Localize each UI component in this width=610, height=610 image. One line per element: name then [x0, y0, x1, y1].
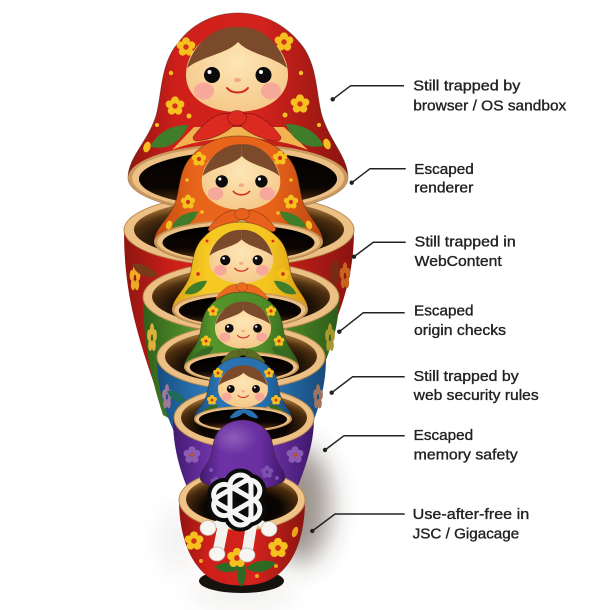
label: browser / OS sandbox — [330, 79, 567, 115]
label: web security rules: web security rules — [413, 388, 539, 404]
doll 2 top: orange — [154, 136, 323, 264]
label: still trapped in WebContent: WebContent — [415, 254, 502, 270]
doll 5 top: blue — [194, 357, 292, 432]
label: escaped renderer: renderer — [414, 181, 473, 197]
doll 3 lower shell: green — [143, 262, 339, 430]
label: web security rules: Still trapped by — [414, 369, 520, 385]
label: escaped renderer — [350, 162, 474, 197]
drop shadow — [166, 447, 330, 597]
doll 3 top: yellow — [172, 222, 308, 328]
label: use-after-free: JSC / Gigacage — [413, 526, 519, 542]
label: web security rules — [330, 369, 539, 404]
logo — [210, 475, 264, 525]
label: browser / OS sandbox: Still trapped by — [413, 79, 521, 95]
legs and arms — [212, 520, 268, 553]
purple top half — [200, 420, 285, 490]
label: escaped memory safety: memory safety — [414, 447, 519, 463]
label: escaped renderer: Escaped — [414, 162, 474, 178]
label: use-after-free: Use-after-free in — [413, 507, 529, 523]
label: escaped origin checks: origin checks — [414, 323, 506, 339]
label: use-after-free — [310, 507, 529, 542]
doll 1 top: red headscarf doll — [128, 13, 348, 212]
label: escaped memory safety: Escaped — [414, 428, 473, 444]
label: browser / OS sandbox: browser / OS sandbox — [413, 99, 567, 115]
label: escaped origin checks — [337, 304, 506, 339]
doll 5 lower shell: purple — [173, 388, 314, 505]
doll 1 lower shell: red — [124, 194, 354, 410]
label: still trapped in WebContent — [352, 235, 516, 270]
doll 4 top: green — [184, 292, 299, 383]
gold chest panel — [172, 127, 308, 150]
label: still trapped in WebContent: Still trapped in — [415, 235, 516, 251]
OpenAI knot character — [200, 475, 277, 562]
innermost doll: small red shell — [179, 470, 305, 587]
label: escaped origin checks: Escaped — [414, 304, 474, 320]
black stand — [199, 569, 284, 593]
doll 4 lower shell: blue — [157, 325, 326, 450]
label: escaped memory safety — [323, 428, 519, 463]
hands and feet — [200, 520, 277, 562]
